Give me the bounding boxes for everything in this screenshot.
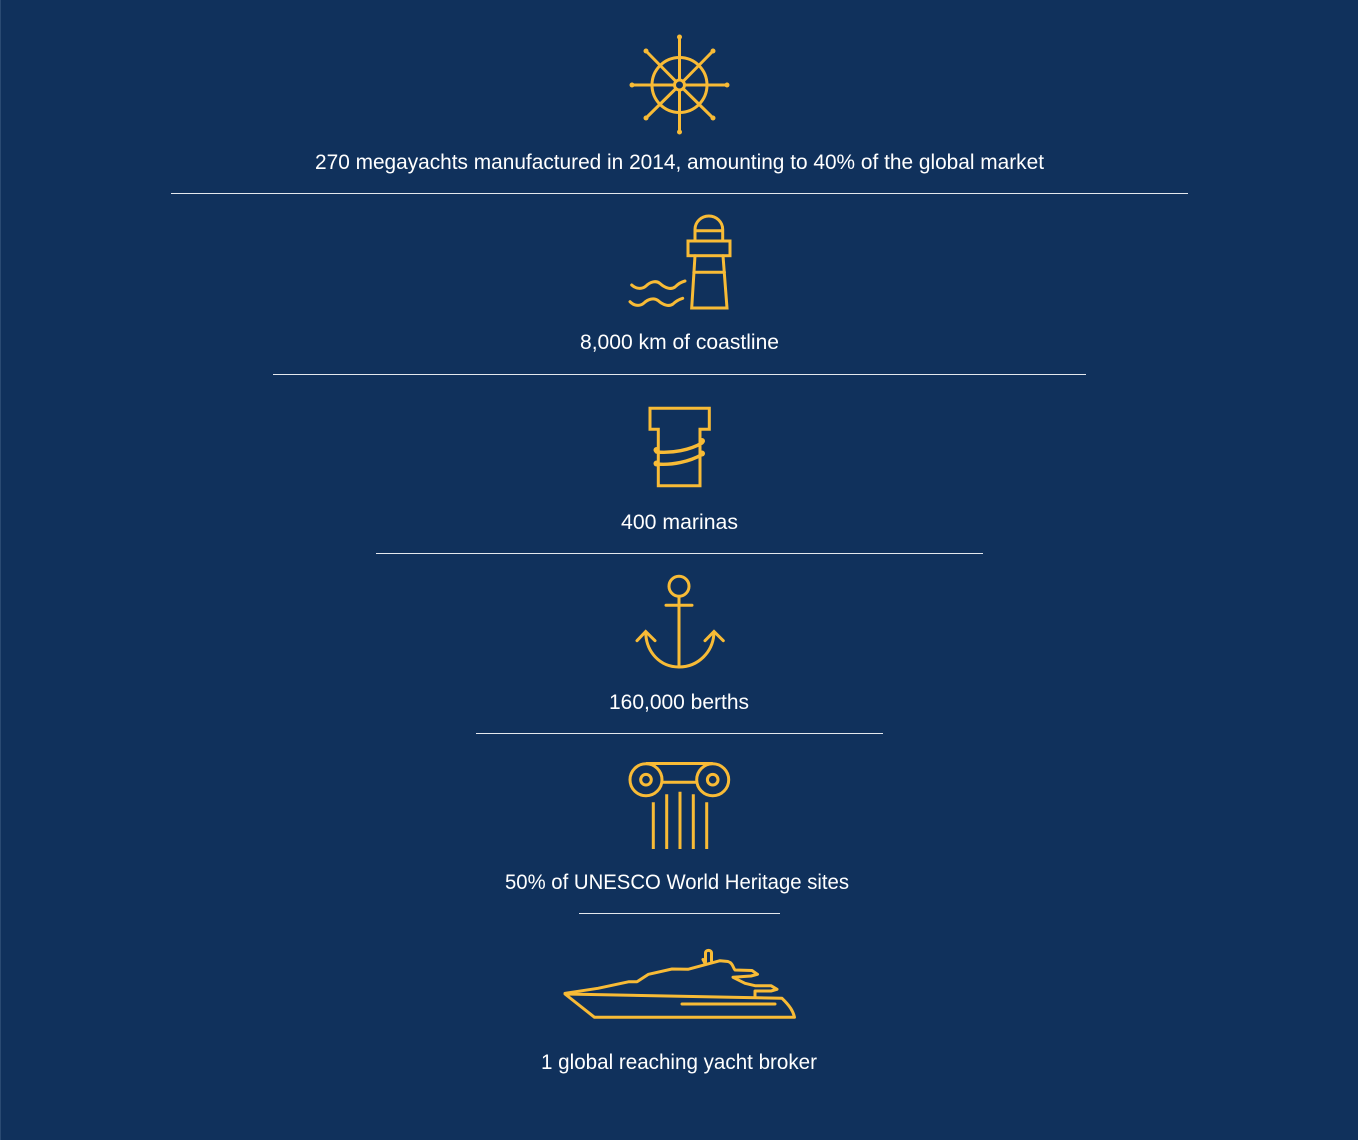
text: UNESCO: 50% of UNESCO World Heritage sites xyxy=(505,871,849,894)
text: marinas: 400 marinas xyxy=(621,511,738,534)
text: megayachts: 270 megayachts manufactured in 2014, amounting to 40% of the global market xyxy=(315,151,1044,174)
icon: yacht xyxy=(565,950,794,1017)
icon: mooring bollard xyxy=(650,408,709,486)
icon: anchor xyxy=(637,576,723,667)
text: berths: 160,000 berths xyxy=(609,691,749,714)
text: yacht broker: 1 global reaching yacht broker xyxy=(541,1051,817,1074)
icon: ship helm xyxy=(630,34,730,134)
icon: lighthouse and waves xyxy=(630,216,730,308)
text: coastline: 8,000 km of coastline xyxy=(580,331,779,354)
icon: ionic column xyxy=(630,764,729,849)
